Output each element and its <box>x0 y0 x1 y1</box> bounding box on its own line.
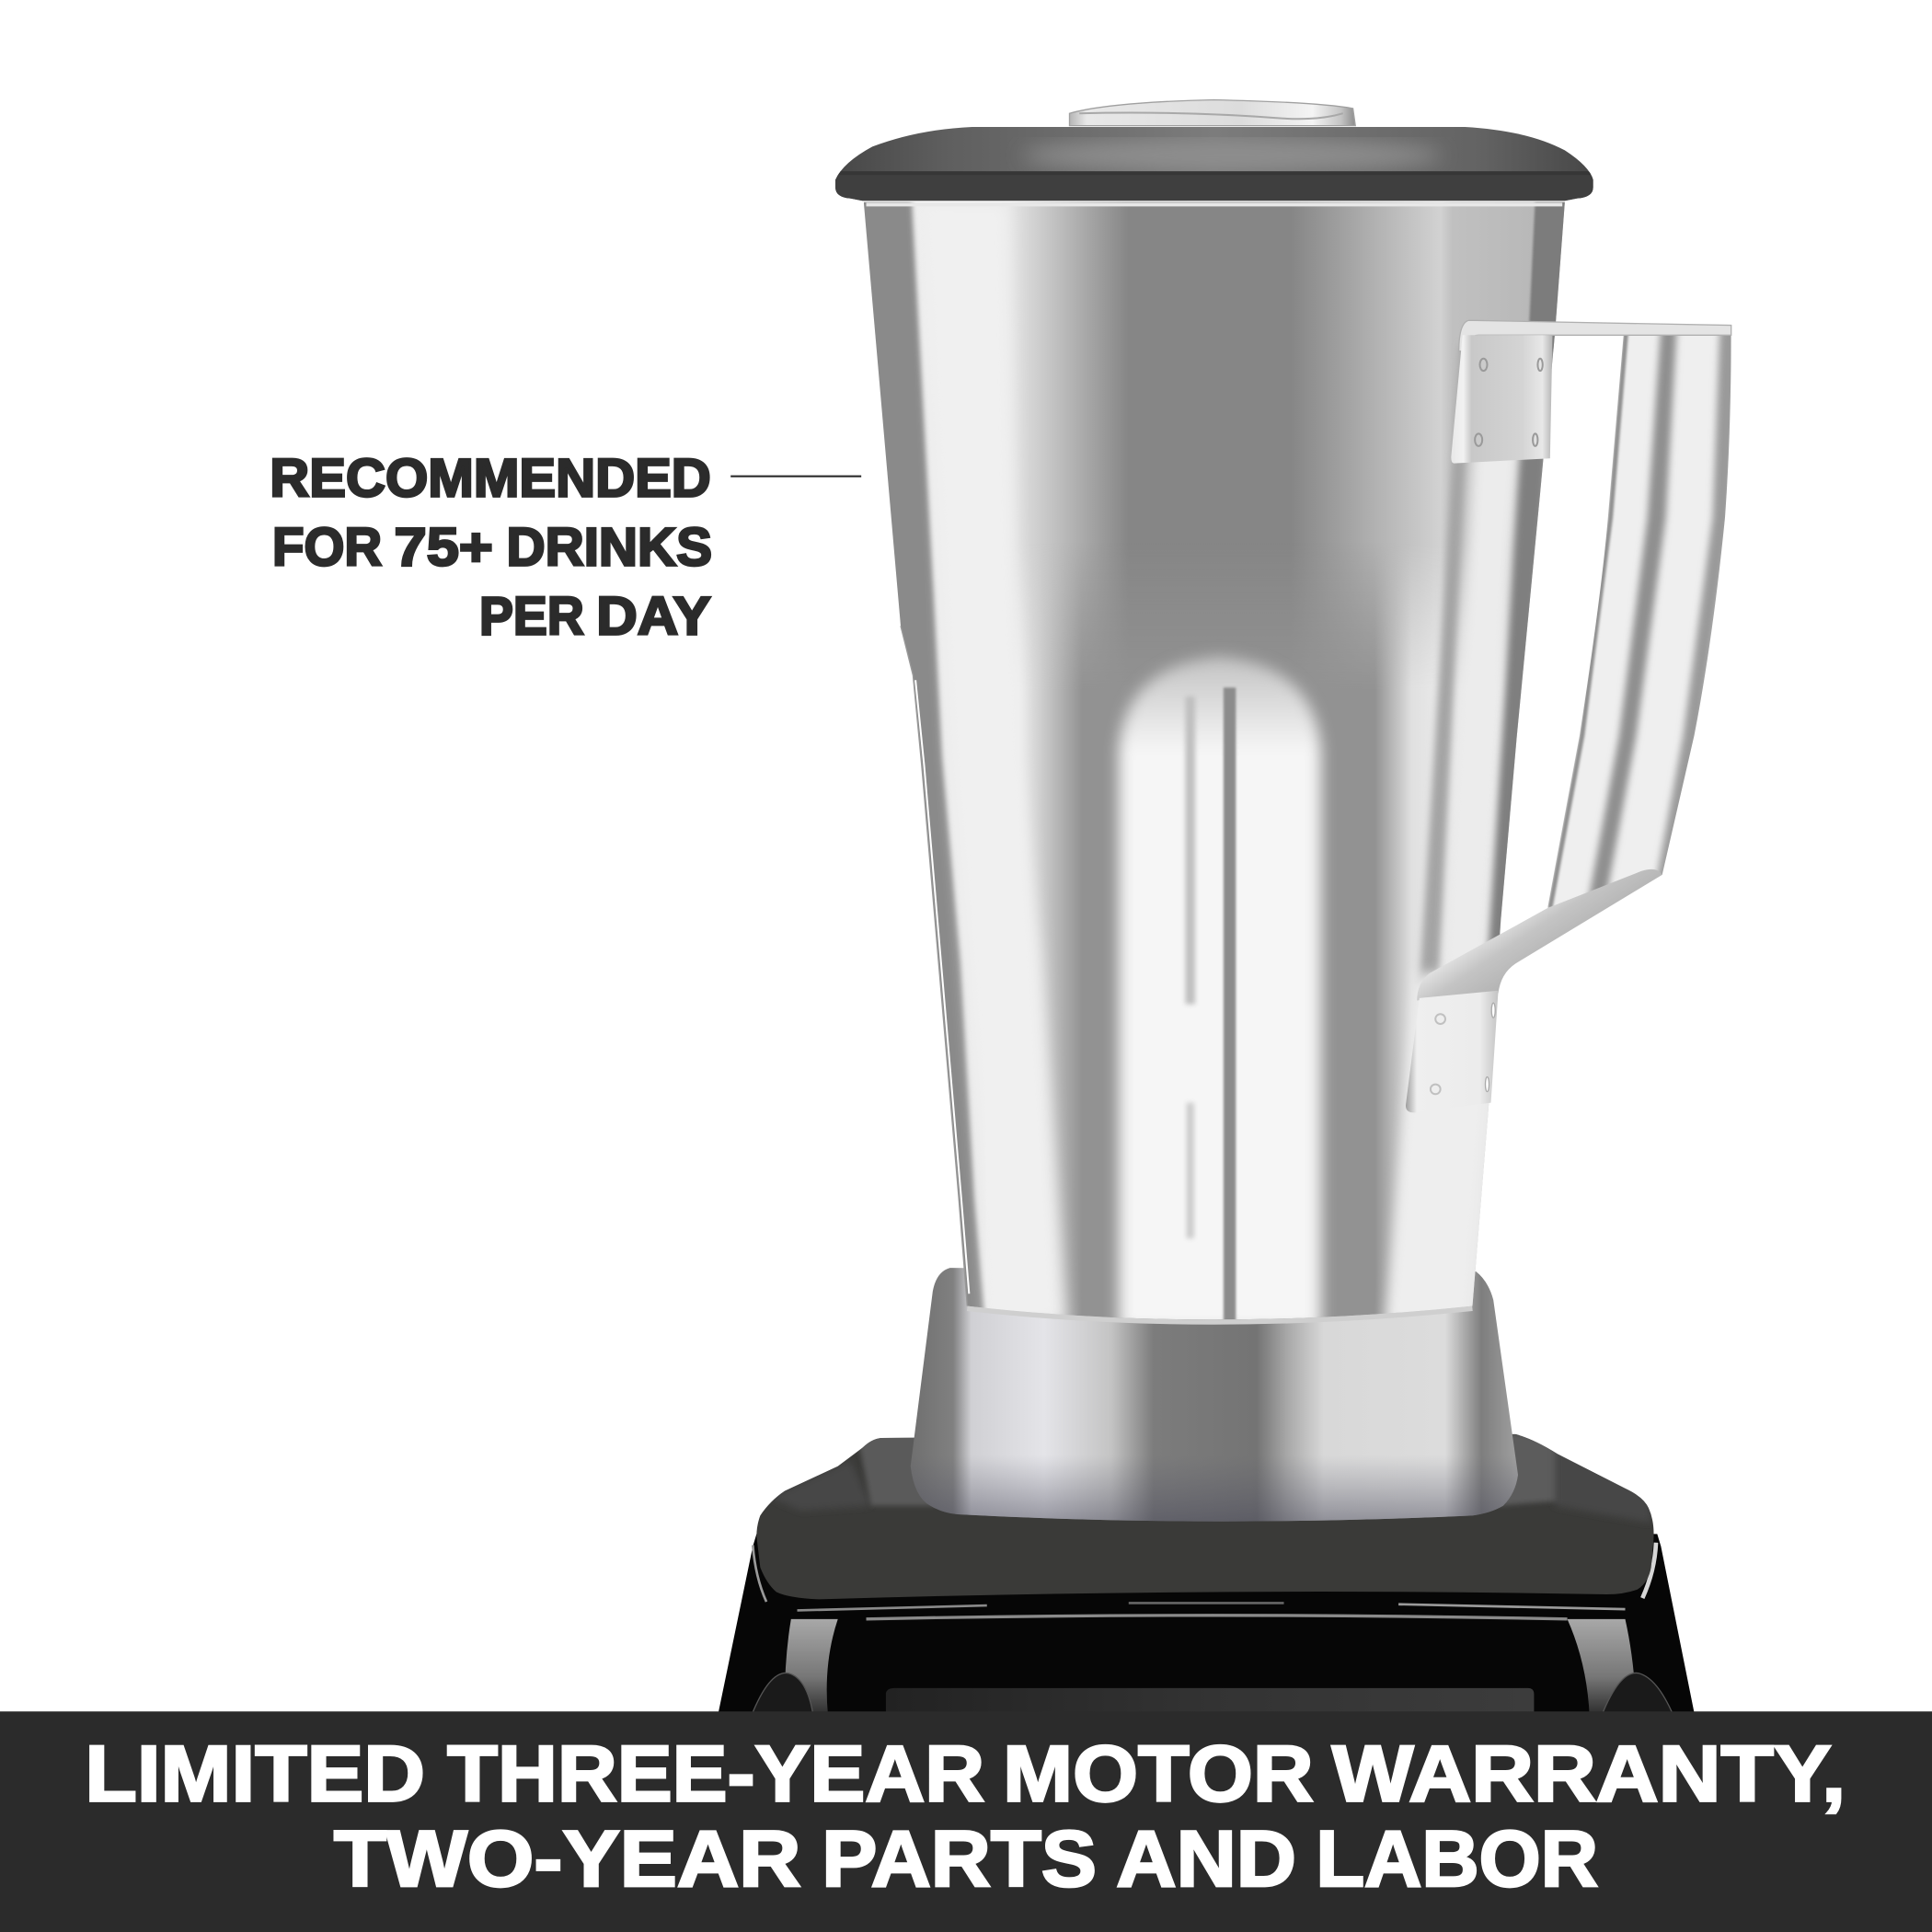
banner heading: LIMITED <box>85 1730 425 1818</box>
callout leader line <box>730 476 861 477</box>
callout: recommended for 75+ drinks per day: 75+ <box>395 518 493 578</box>
callout: recommended for 75+ drinks per day: DRINKS <box>506 518 712 578</box>
banner heading: AND <box>1116 1815 1296 1903</box>
banner heading: WARRANTY, <box>1332 1730 1846 1818</box>
handle lower strap <box>1417 869 1662 1001</box>
banner heading: TWO-YEAR <box>334 1815 801 1903</box>
callout: recommended for 75+ drinks per day: DAY <box>596 587 711 647</box>
callout: recommended for 75+ drinks per day: FOR <box>272 518 382 578</box>
upper handle bracket <box>1451 335 1553 464</box>
banner heading: THREE-YEAR <box>447 1730 984 1818</box>
stainless jar body <box>857 197 1571 1343</box>
callout: recommended for 75+ drinks per day: PER <box>479 587 584 647</box>
jar handle <box>1406 320 1740 1112</box>
handle top bar <box>1459 320 1731 351</box>
banner heading <box>85 1730 1846 1903</box>
callout: recommended for 75+ drinks per day <box>270 449 712 647</box>
jar collar <box>911 1268 1518 1522</box>
banner heading: MOTOR <box>1003 1730 1314 1818</box>
lower handle bracket <box>1406 991 1499 1112</box>
callout: recommended for 75+ drinks per day: RECOMMENDED <box>270 449 711 509</box>
lid knob <box>1069 99 1355 126</box>
jar lid <box>825 99 1602 203</box>
motor base <box>717 1534 1696 1719</box>
blender product illustration <box>717 99 1740 1719</box>
warranty banner <box>0 1711 1932 1932</box>
banner heading: LABOR <box>1316 1815 1598 1903</box>
rubber pad <box>756 1430 1654 1599</box>
banner heading: PARTS <box>822 1815 1097 1903</box>
